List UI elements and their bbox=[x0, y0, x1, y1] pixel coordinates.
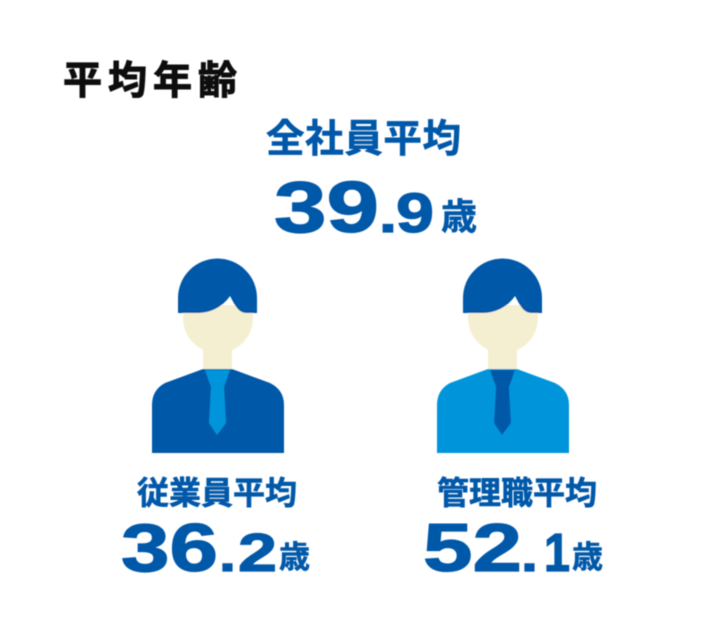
employee average value: . bbox=[219, 529, 236, 582]
employee average value: 歳 bbox=[279, 540, 310, 575]
tie bbox=[490, 370, 515, 435]
overall average value: 39 bbox=[274, 168, 379, 248]
overall average value: 9 bbox=[396, 181, 434, 244]
employee average value: 36 bbox=[121, 510, 218, 586]
body bbox=[437, 369, 569, 453]
employee average block bbox=[121, 475, 310, 586]
tie bbox=[205, 370, 230, 435]
hair bbox=[463, 258, 542, 313]
hair bbox=[178, 258, 257, 313]
employee average value bbox=[121, 510, 310, 586]
icon: manager figure bbox=[437, 258, 569, 453]
icon: employee figure bbox=[152, 258, 284, 453]
neck bbox=[488, 345, 517, 369]
manager average value: 52 bbox=[423, 510, 522, 586]
face bbox=[183, 305, 253, 353]
face bbox=[468, 305, 538, 353]
body bbox=[152, 369, 284, 453]
title: 平均年齢 bbox=[63, 60, 237, 103]
manager average label: 管理職平均 bbox=[437, 475, 597, 511]
manager average value: . bbox=[521, 529, 538, 582]
overall average value: . bbox=[379, 187, 397, 243]
employee average value: 2 bbox=[238, 523, 277, 583]
overall average label: 全社員平均 bbox=[266, 118, 461, 161]
overall average value bbox=[274, 168, 477, 248]
neck bbox=[203, 345, 232, 369]
manager average value bbox=[423, 510, 603, 586]
manager average value: 歳 bbox=[572, 540, 603, 575]
manager average block bbox=[423, 475, 603, 586]
overall average block bbox=[266, 118, 477, 248]
employee average label: 従業員平均 bbox=[137, 475, 297, 511]
overall average value: 歳 bbox=[441, 196, 477, 237]
manager average value: 1 bbox=[544, 523, 570, 583]
